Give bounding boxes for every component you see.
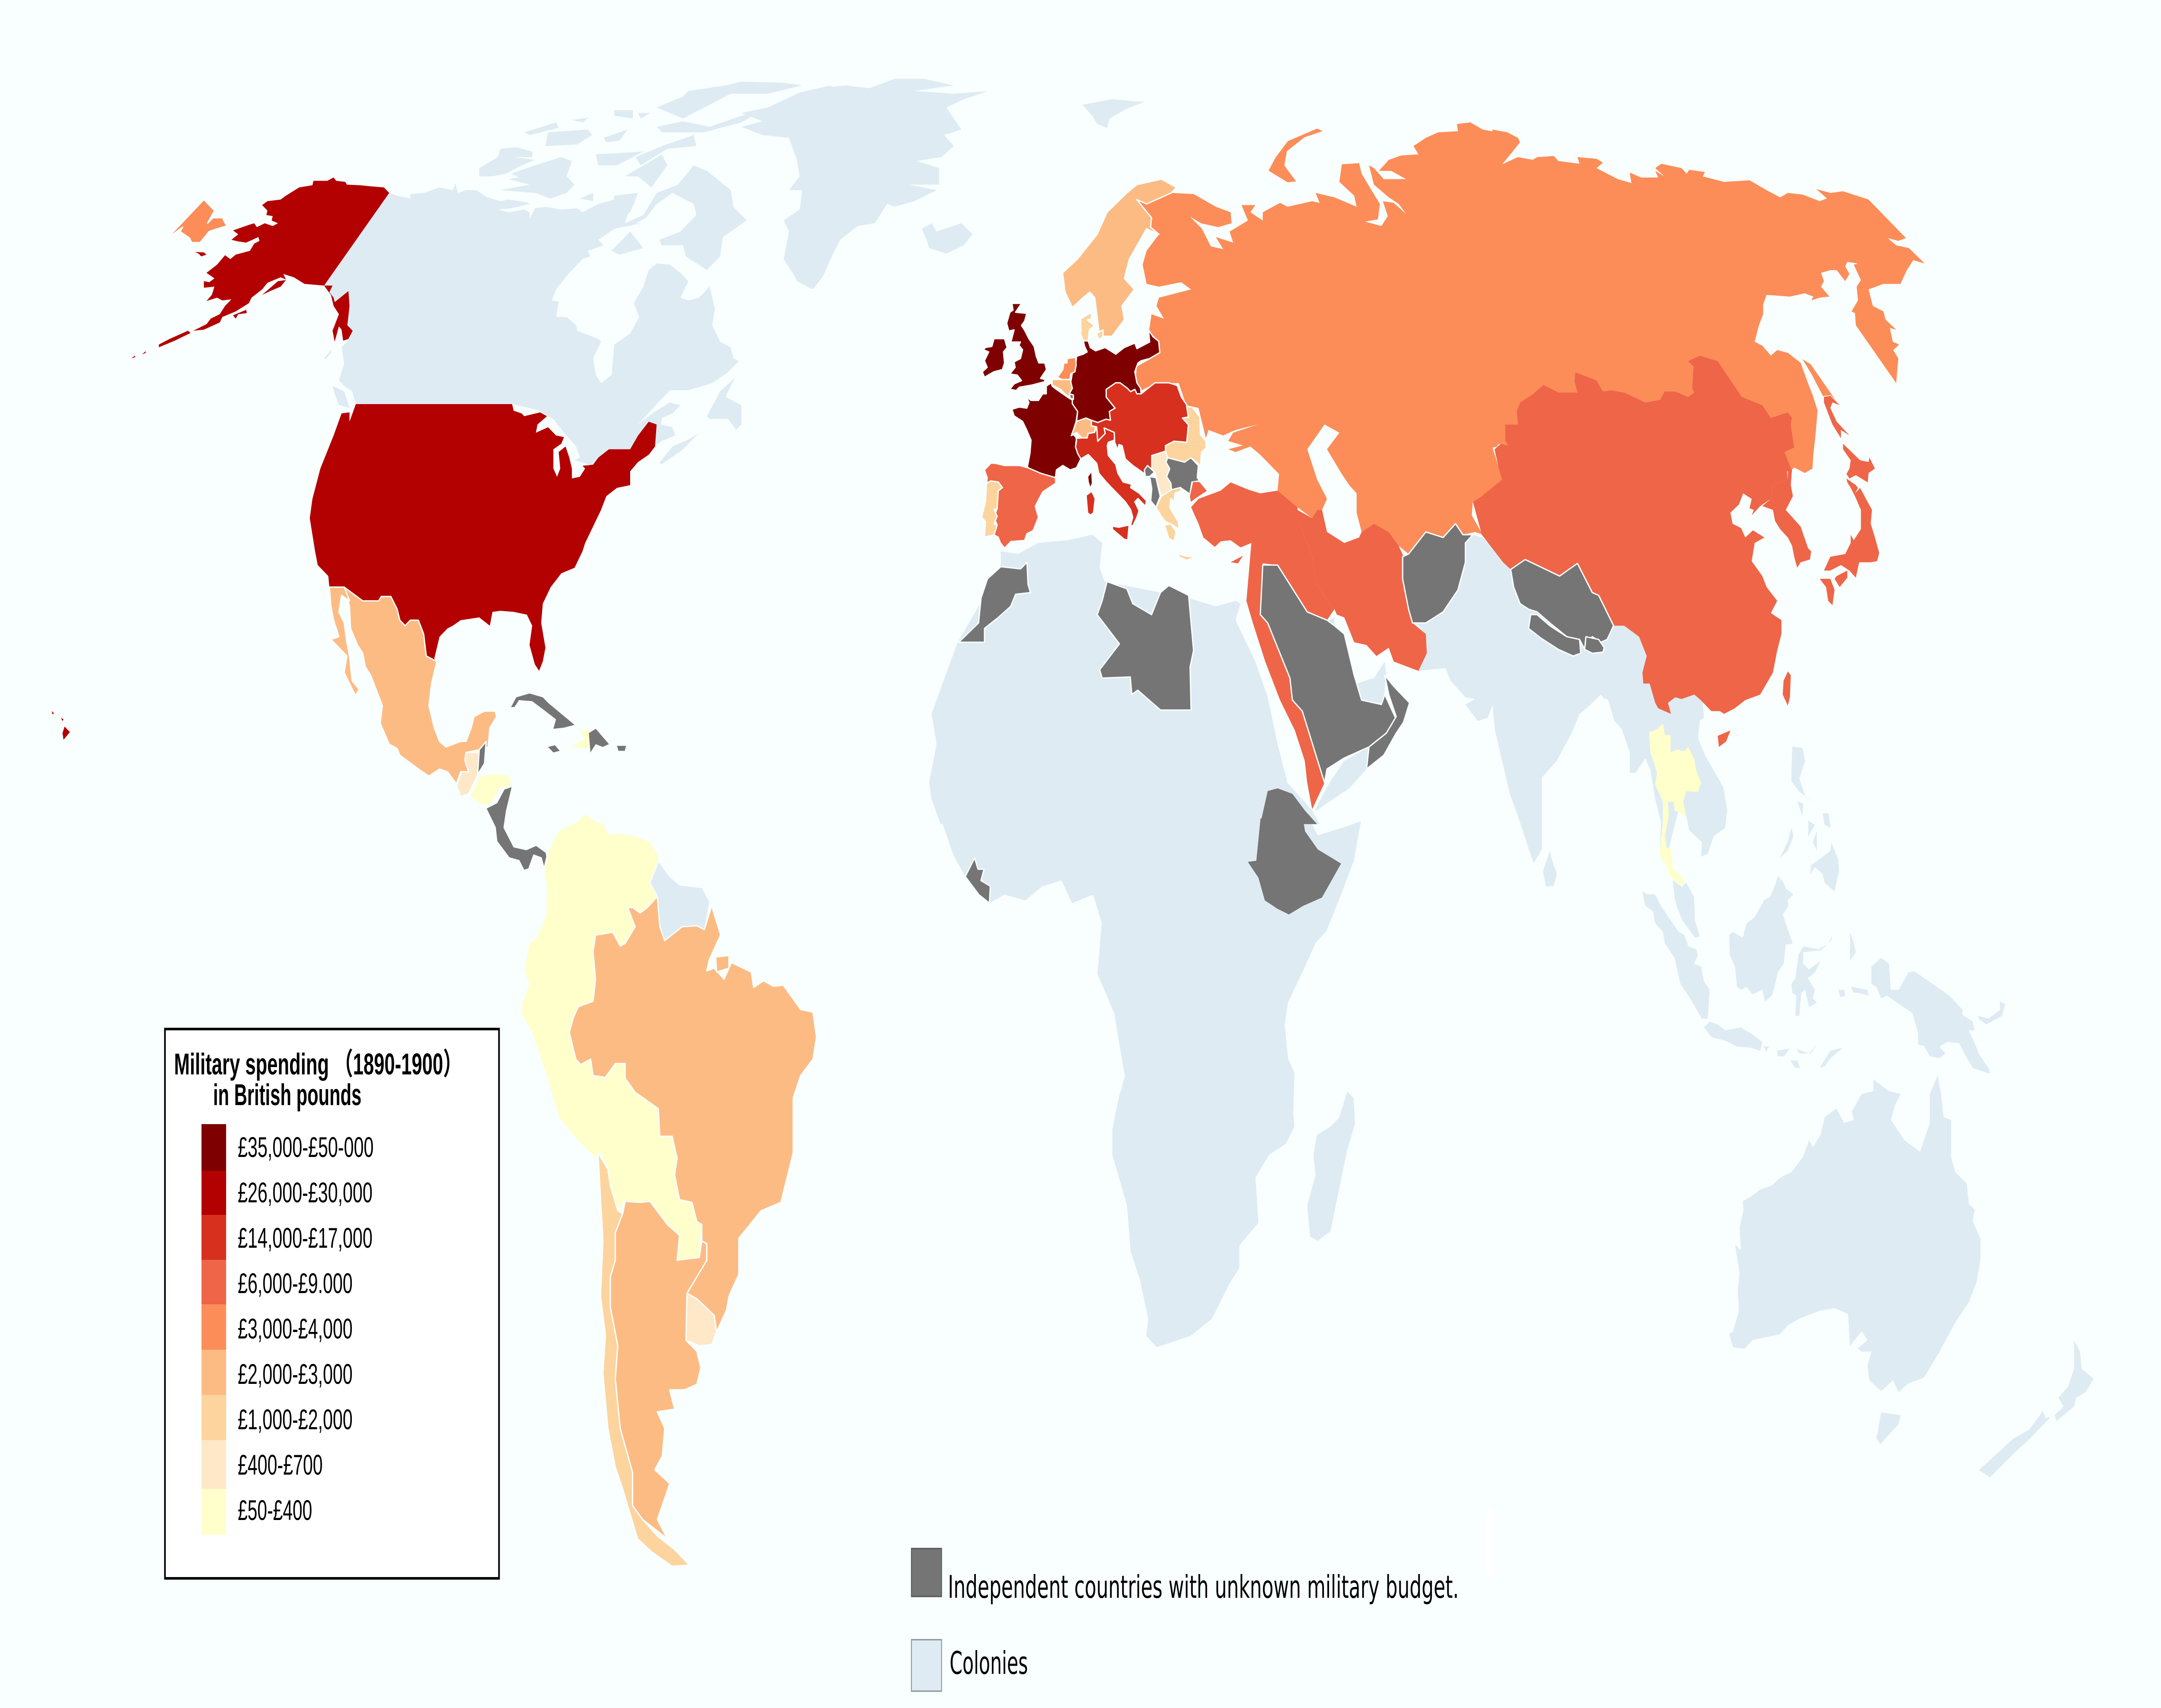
contiguous states (310, 404, 657, 671)
Greenland (741, 79, 988, 290)
Liberia (965, 858, 990, 903)
legend title: Military spending （1890-1900） (174, 1048, 462, 1081)
South America (521, 814, 816, 1566)
Brazil (569, 896, 816, 1332)
Montenegro (1144, 465, 1154, 477)
key: colonies (912, 1640, 1028, 1691)
Persia (1297, 510, 1427, 671)
colour scale labels: £35,000-£50-000 (238, 1131, 373, 1163)
New Zealand (1979, 1340, 2094, 1477)
Guianas (650, 860, 709, 940)
key: independent countries with unknown budget (912, 1549, 1459, 1606)
United States (52, 178, 657, 740)
colour scale labels: £2,000-£3,000 (238, 1358, 353, 1390)
Arabia (1260, 565, 1396, 783)
colour scale swatches (201, 1124, 226, 1535)
Novaya Zemlya (1268, 128, 1325, 183)
Uruguay (686, 1294, 717, 1346)
Iceland (922, 223, 972, 254)
colonies: all colonial territories (324, 79, 2094, 1477)
Oman (1367, 675, 1409, 769)
north Sakhalin (1801, 357, 1841, 407)
Baja California (329, 587, 359, 696)
Jamaica (548, 745, 560, 752)
Siam (1649, 723, 1701, 886)
Belgium (1052, 379, 1072, 398)
key: colonies: Colonies (950, 1645, 1028, 1682)
Tibet (1511, 560, 1613, 648)
Ethiopia (1248, 788, 1341, 915)
Belize (478, 742, 486, 774)
Russian Empire (167, 122, 1925, 554)
key: independent countries with unknown budget: Independent countries with unknown military budget. (948, 1569, 1459, 1606)
Bulgaria (1166, 458, 1199, 494)
legend title (174, 1048, 462, 1112)
Great Britain (1007, 303, 1046, 393)
Portugal (982, 481, 1002, 537)
Switzerland (1071, 418, 1096, 438)
Ceylon (1543, 851, 1557, 887)
Europe (982, 179, 1206, 560)
Caribbean (511, 694, 626, 752)
Netherlands (1058, 357, 1076, 379)
China (1473, 356, 1794, 714)
independent countries with unknown budget (959, 524, 1613, 915)
colour scale labels: £1,000-£2,000 (238, 1403, 353, 1435)
Australia (1729, 1075, 1980, 1392)
Romania (1166, 407, 1206, 465)
Chukotka tip (167, 200, 226, 242)
colour scale labels (238, 1131, 373, 1526)
Albania (1150, 477, 1160, 507)
Crete (1178, 554, 1195, 560)
Mexico (344, 587, 497, 784)
Sardinia (1086, 491, 1095, 515)
colour scale labels: £3,000-£4,000 (238, 1313, 353, 1345)
Dominican Republic (589, 729, 609, 752)
Puerto Rico (617, 746, 626, 751)
New Britain (1979, 1001, 2005, 1025)
Dutch East Indies and Philippines (1642, 747, 1869, 1068)
Sicily (1112, 525, 1129, 540)
Luxembourg (1069, 394, 1074, 399)
legend title: in British pounds (213, 1078, 361, 1112)
Hainan (1718, 730, 1731, 747)
Colombia, Venezuela, Ecuador, Peru, Bolivia, Paraguay (521, 814, 702, 1260)
Alaska (131, 178, 389, 358)
Korea (1763, 468, 1811, 568)
Taiwan (1783, 672, 1791, 706)
Africa (929, 535, 1361, 1347)
Morocco (959, 562, 1030, 642)
Canada (324, 82, 802, 466)
Guatemala (456, 752, 479, 797)
Tasmania (1877, 1412, 1901, 1444)
Germany (1069, 330, 1160, 423)
Serbia (1152, 451, 1171, 496)
South Arabia and Gulf colonies (1315, 618, 1386, 810)
Cuba (511, 694, 574, 729)
Afghanistan (1402, 524, 1473, 623)
Nepal (1529, 615, 1581, 656)
Honduras and El Salvador (470, 774, 513, 806)
colour scale labels: £14,000-£17,000 (238, 1222, 373, 1254)
British India and Indochina (1412, 535, 1727, 863)
Scandinavia (1063, 179, 1176, 336)
Haiti (572, 730, 589, 749)
Austria-Hungary (1091, 383, 1189, 474)
Bhutan (1584, 637, 1604, 653)
Argentina (610, 1201, 707, 1539)
colour scale labels: £400-£700 (238, 1449, 323, 1481)
Corsica (1087, 471, 1093, 489)
France (1012, 383, 1081, 478)
Zealand (1096, 330, 1103, 340)
legend box (165, 1029, 499, 1578)
Nicaragua, Costa Rica, Panama (486, 786, 548, 870)
Spain (985, 463, 1056, 548)
Hawaii (52, 711, 70, 740)
Chile (598, 1153, 689, 1566)
colour scale labels: £50-£400 (238, 1494, 312, 1526)
Malaya (1673, 880, 1700, 938)
Tripoli (1097, 582, 1194, 710)
Madagascar (1307, 1092, 1355, 1241)
Greece (1156, 488, 1181, 529)
Ireland (982, 339, 1007, 377)
Svalbard (1082, 99, 1144, 128)
colour scale labels: £26,000-£30,000 (238, 1176, 373, 1208)
Marajo island (716, 956, 729, 972)
Italy (1075, 427, 1147, 526)
Peloponnese (1164, 524, 1176, 542)
Japan (1820, 396, 1879, 605)
Ottoman Empire (1190, 482, 1334, 809)
colour scale labels: £6,000-£9.000 (238, 1267, 353, 1299)
New Guinea (1871, 958, 1989, 1074)
legend: military spending (165, 1029, 499, 1578)
Mexico and Central America (329, 587, 548, 870)
Denmark (1081, 312, 1095, 341)
